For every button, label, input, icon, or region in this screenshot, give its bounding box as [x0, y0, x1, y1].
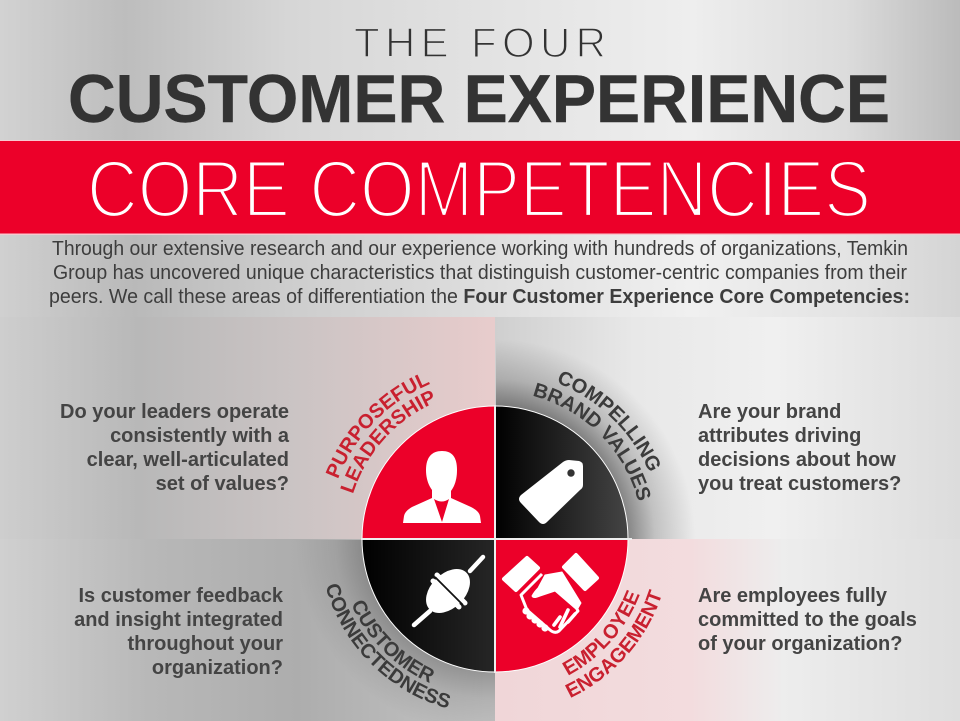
icon: plug: [414, 557, 483, 625]
question: customer connectedness: [74, 585, 284, 679]
question: customer connectedness: and insight integrated: [74, 609, 283, 631]
icon: handshake: [504, 555, 597, 632]
question: compelling brand values: you treat customers?: [698, 473, 901, 495]
label: customer connectedness: CONNECTEDNESS: [327, 584, 450, 708]
question: purposeful leadership: set of values?: [156, 473, 289, 495]
label: employee engagement: ENGAGEMENT: [565, 589, 661, 698]
question: purposeful leadership: consistently with a: [110, 425, 290, 447]
label: compelling brand values: BRAND VALUES: [534, 382, 650, 500]
quadrant wheel: [361, 405, 632, 673]
question: employee engagement: Are employees fully: [698, 585, 888, 607]
intro text: Group has uncovered unique characteristics that distinguish customer-centric companies from their: [53, 261, 907, 284]
question: employee engagement: committed to the goals: [698, 609, 917, 631]
title: the four: THE FOUR: [354, 19, 606, 66]
title: customer experience: CUSTOMER EXPERIENCE: [68, 61, 890, 137]
question: employee engagement: [698, 585, 917, 655]
intro text: Through our extensive research and our experience working with hundreds of organizations, Temkin: [52, 237, 908, 260]
label: compelling brand values: COMPELLING: [558, 372, 660, 471]
question: purposeful leadership: Do your leaders operate: [60, 401, 289, 423]
question: customer connectedness: Is customer feedback: [78, 585, 284, 607]
question: purposeful leadership: clear, well-articulated: [87, 449, 289, 471]
question: compelling brand values: [698, 401, 901, 495]
icon: person: [403, 451, 481, 523]
question: employee engagement: of your organization?: [698, 633, 902, 655]
intro text: [49, 237, 910, 308]
label: purposeful leadership: LEADERSHIP: [340, 391, 433, 493]
label: customer connectedness: CUSTOMER: [353, 600, 434, 683]
question: compelling brand values: Are your brand: [698, 401, 841, 423]
question: customer connectedness: organization?: [152, 657, 283, 679]
label: purposeful leadership: PURPOSEFUL: [326, 374, 430, 478]
intro text: peers. We call these areas of differentiation the Four Customer Experience Core Competencies:: [49, 285, 910, 308]
question: compelling brand values: attributes driving: [698, 425, 861, 447]
question: customer connectedness: throughout your: [127, 633, 283, 655]
label: employee engagement: EMPLOYEE: [562, 590, 640, 676]
question: compelling brand values: decisions about how: [698, 449, 896, 471]
question: purposeful leadership: [60, 401, 290, 495]
icon: price tag: [519, 460, 583, 524]
